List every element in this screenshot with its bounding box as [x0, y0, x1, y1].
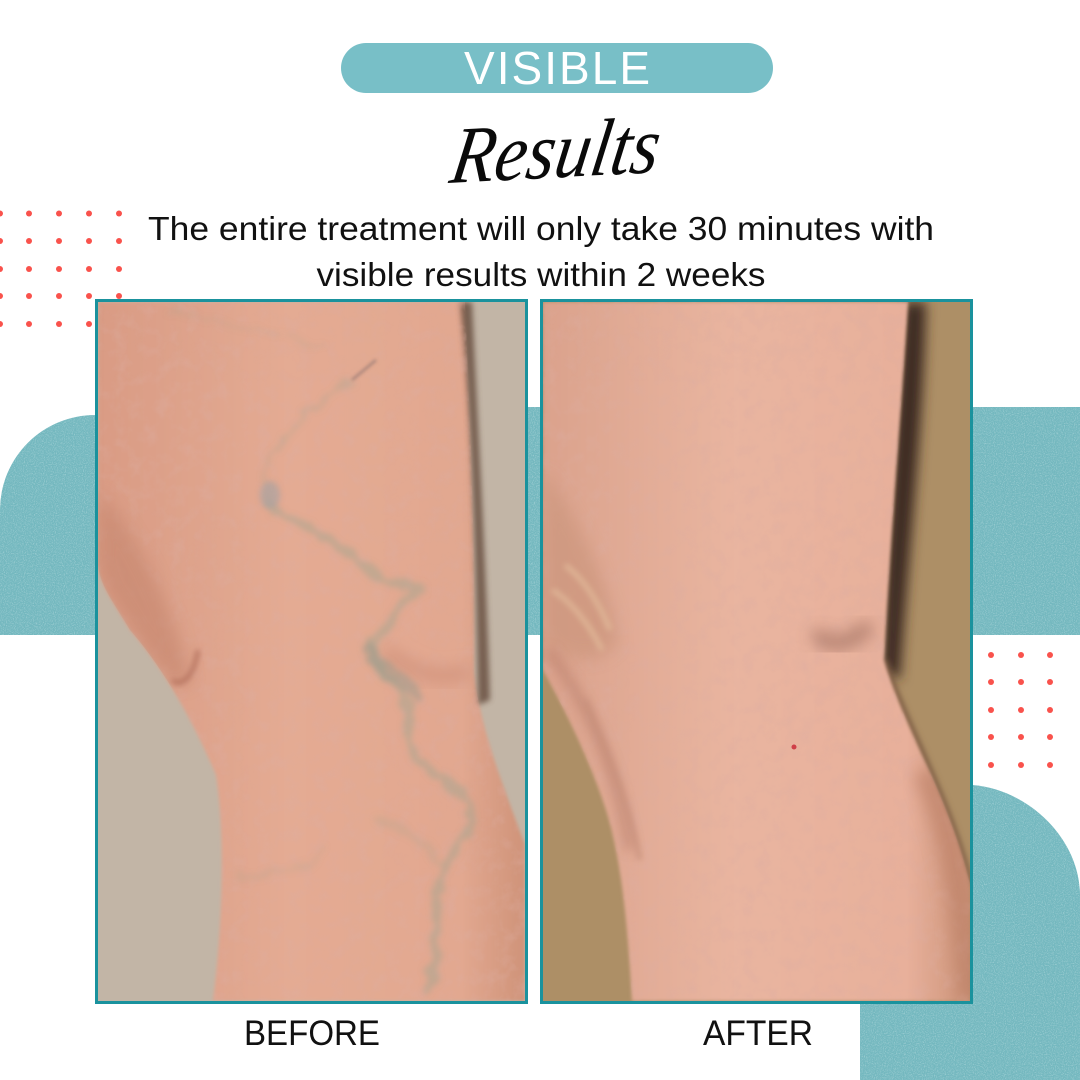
description text: The entire treatment will only take 30 minutes with: [148, 211, 934, 248]
caption: AFTER: AFTER: [703, 1014, 813, 1053]
veins: [238, 378, 478, 995]
dot pattern: right: [988, 652, 1053, 768]
description text: visible results within 2 weeks: [316, 257, 766, 294]
leg: after: [543, 302, 970, 1001]
after photo panel: [540, 299, 973, 1004]
description text: [148, 211, 934, 294]
knee-fold shading: [546, 493, 618, 660]
caption: BEFORE: BEFORE: [244, 1014, 380, 1053]
title script: Results: Results: [444, 100, 667, 201]
dot pattern: top left: [0, 210, 122, 327]
title pill: VISIBLE: VISIBLE: [464, 42, 650, 94]
title pill: VISIBLE: [341, 42, 773, 94]
back of knee shading: [98, 490, 190, 685]
teal background shapes: [0, 400, 1080, 1080]
before photo panel: [95, 299, 528, 1004]
shadow behind leg: [460, 302, 490, 705]
leg: before: [98, 302, 525, 1001]
shadow behind leg: [882, 302, 926, 680]
